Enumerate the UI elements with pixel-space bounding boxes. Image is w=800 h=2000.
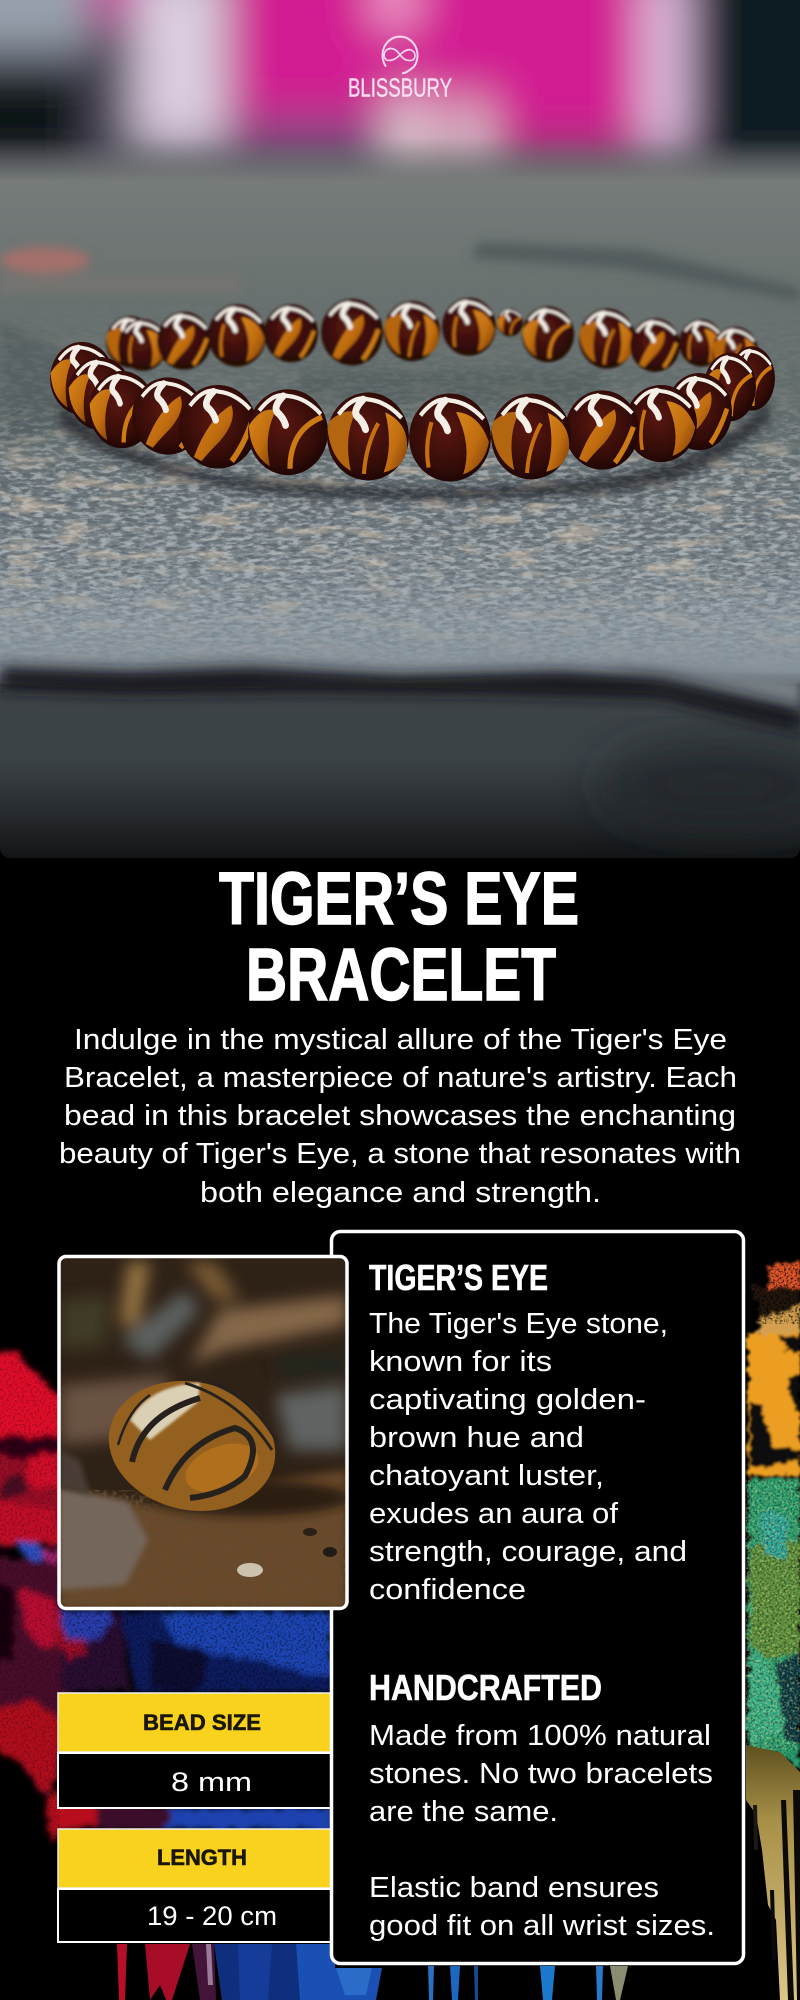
spec table: bead size	[58, 1693, 332, 1808]
stone texture	[0, 351, 800, 658]
ground	[59, 1470, 347, 1610]
intro paragraph: Bracelet, a masterpiece of nature's artistry. Each	[64, 1062, 737, 1094]
spec table: length: LENGTH	[157, 1845, 247, 1870]
stone photo card	[59, 1256, 350, 1610]
photo background	[59, 1257, 347, 1608]
details panel	[332, 1232, 744, 1964]
front beads	[674, 373, 732, 450]
text: stone description: exudes an aura of	[369, 1498, 618, 1530]
value cell	[58, 1753, 332, 1808]
title	[219, 857, 579, 1016]
bracelet shadow	[60, 398, 770, 500]
stone slab	[0, 138, 800, 688]
text: handcrafted details	[369, 1720, 715, 1942]
spec table: bead size: BEAD SIZE	[143, 1710, 261, 1735]
intro paragraph: both elegance and strength.	[200, 1177, 601, 1209]
text: stone description: captivating golden-	[369, 1384, 646, 1416]
value cell	[58, 1889, 332, 1942]
text: handcrafted details: are the same.	[369, 1796, 558, 1828]
spec table: length	[58, 1829, 332, 1942]
spec table: bead size: 8 mm	[171, 1767, 252, 1797]
icon: infinity ring	[382, 37, 418, 73]
text: stone description: strength, courage, and	[369, 1536, 687, 1568]
spec table: length: 19 - 20 cm	[147, 1901, 277, 1931]
heading: tiger's eye: TIGER’S EYE	[369, 1257, 548, 1298]
brand name: BLISSBURY	[348, 74, 452, 103]
text: stone description: The Tiger's Eye stone,	[369, 1308, 668, 1340]
photo border	[59, 1256, 347, 1608]
logo	[348, 37, 452, 103]
paint drips bottom	[117, 1944, 628, 2000]
text: handcrafted details: good fit on all wrist sizes.	[369, 1910, 715, 1942]
blurred street background	[0, 0, 800, 179]
yellow drips	[746, 1745, 800, 2000]
foreground rocks	[60, 1488, 148, 1590]
intro paragraph: Indulge in the mystical allure of the Tiger's Eye	[74, 1024, 727, 1056]
bracelet	[50, 298, 775, 482]
label cell	[58, 1829, 332, 1888]
text: stone description	[369, 1308, 687, 1606]
heading: handcrafted: HANDCRAFTED	[369, 1667, 602, 1708]
label cell	[58, 1693, 332, 1752]
title: BRACELET	[246, 933, 556, 1016]
tiger's eye stone	[108, 1381, 277, 1511]
intro paragraph: bead in this bracelet showcases the enchanting	[64, 1100, 736, 1132]
back beads	[106, 298, 758, 376]
text: stone description: confidence	[369, 1574, 526, 1606]
text: handcrafted details: stones. No two bracelets	[369, 1758, 713, 1790]
text: stone description: chatoyant luster,	[369, 1460, 604, 1492]
hero photo: tiger's eye bracelet on stone	[0, 0, 800, 866]
paint splash: right orange, green and yellow	[746, 1262, 800, 2000]
side beads	[737, 346, 775, 410]
intro paragraph: beauty of Tiger's Eye, a stone that resonates with	[59, 1138, 741, 1170]
intro paragraph	[59, 1024, 741, 1209]
text: handcrafted details: Made from 100% natural	[369, 1720, 711, 1752]
text: stone description: brown hue and	[369, 1422, 584, 1454]
title: TIGER’S EYE	[219, 857, 579, 940]
lower stone and crack	[0, 684, 800, 866]
stone streaks	[0, 242, 800, 452]
text: handcrafted details: Elastic band ensures	[369, 1872, 659, 1904]
text: stone description: known for its	[369, 1346, 552, 1378]
paint splash: left red and blue	[0, 1350, 628, 2000]
